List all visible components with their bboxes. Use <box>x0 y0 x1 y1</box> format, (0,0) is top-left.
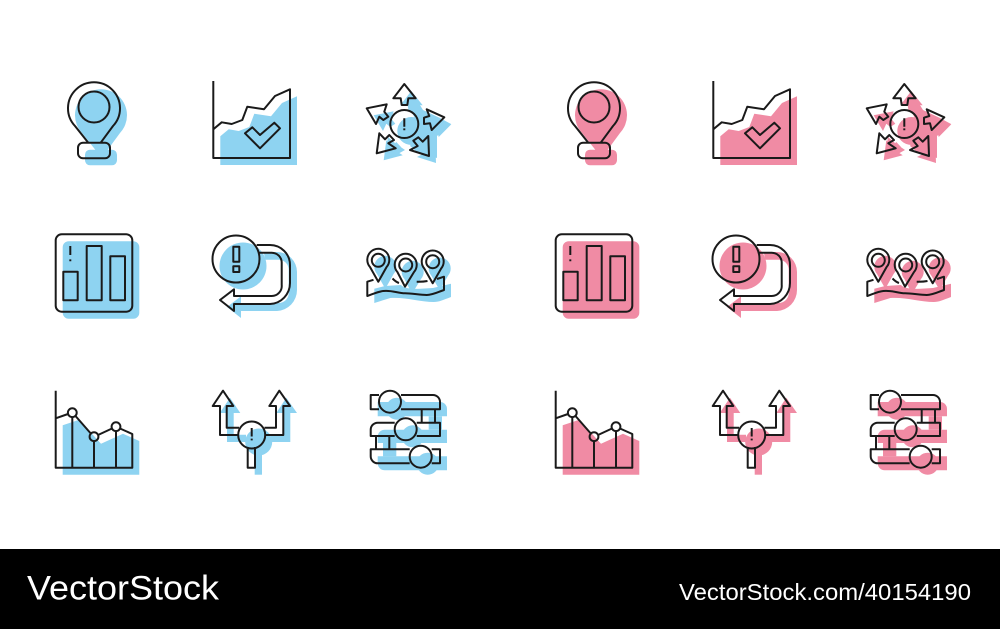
icon: blue location pin <box>68 82 127 165</box>
icon: blue area line chart <box>56 391 139 475</box>
icon: blue growth chart with check <box>213 81 297 165</box>
icon: pink sliders <box>871 391 947 475</box>
icon: pink area line chart <box>556 391 639 475</box>
icon: blue three pins on a map ribbon <box>367 249 451 303</box>
icon: blue sliders <box>371 391 447 475</box>
icon: pink split arrows with alert <box>713 391 797 475</box>
icon: blue split arrows with alert <box>213 391 297 475</box>
icon: pink three pins on a map ribbon <box>867 249 951 303</box>
icon: pink location pin <box>568 82 627 165</box>
icon: blue bar chart card <box>56 234 139 319</box>
brand wordmark: VectorStock <box>27 570 220 608</box>
image id url: VectorStock.com/40154190 <box>679 579 971 605</box>
icon: pink bar chart card <box>556 234 639 319</box>
footer bar <box>0 549 1000 629</box>
icon: blue star of arrows <box>367 84 451 163</box>
icon: blue return arrow with alert <box>212 236 297 318</box>
icon: pink star of arrows <box>867 84 951 163</box>
icon: pink growth chart with check <box>713 81 797 165</box>
icon: pink return arrow with alert <box>712 236 797 318</box>
